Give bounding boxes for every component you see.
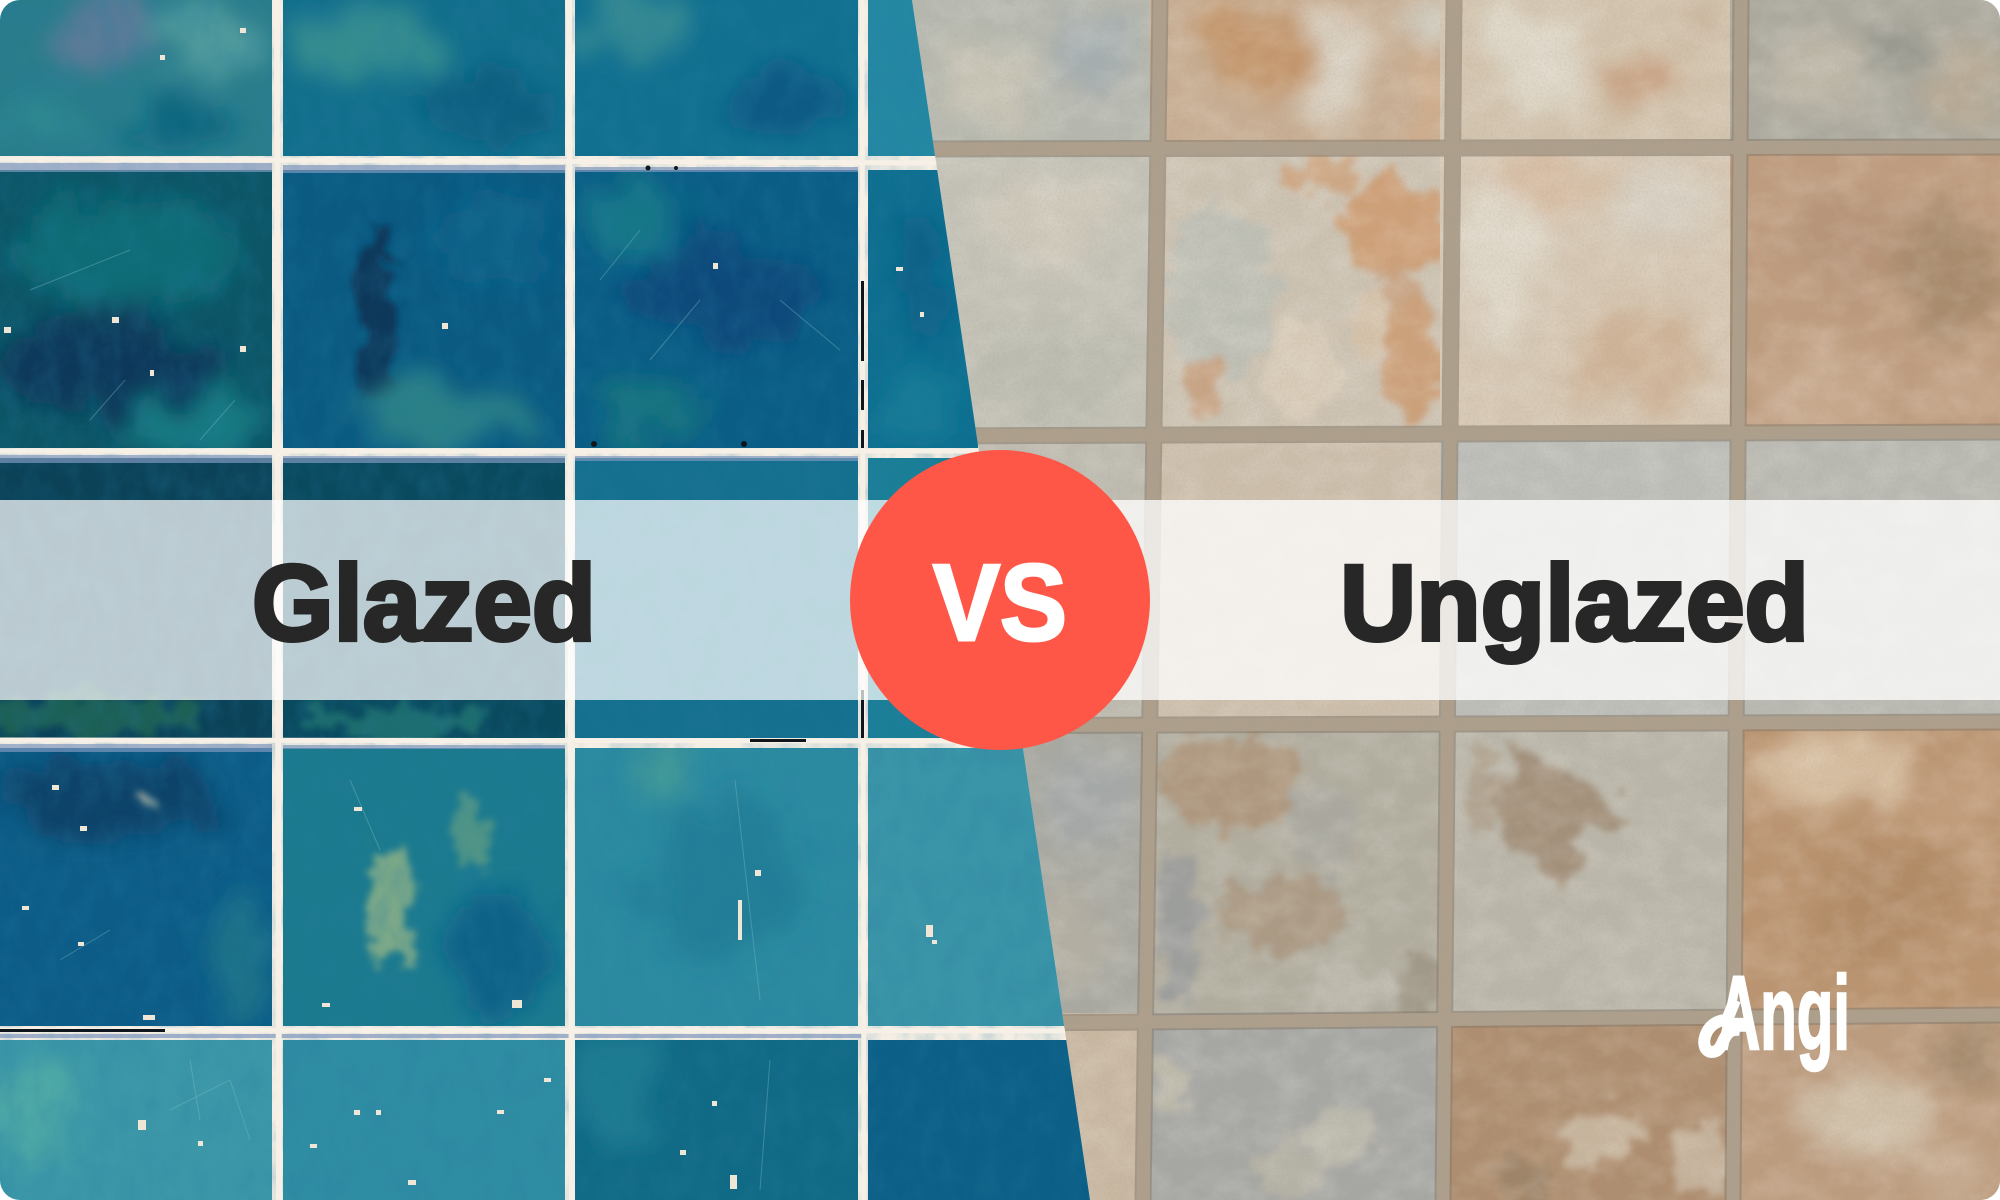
white glaze specks: [4, 28, 937, 1189]
unglazed tile row 1: [900, 0, 2000, 150]
VS badge: [850, 450, 1150, 750]
panel: glazed teal tiles: [0, 0, 1100, 1200]
heading: Unglazed: Unglazed: [1340, 542, 1809, 663]
cracks and dark gaps: [0, 166, 864, 1032]
lavender shadow under grout: [0, 163, 865, 1038]
translucent title band: [0, 500, 2000, 700]
surface scratches: [30, 230, 840, 1190]
unglazed tile row 3: [978, 438, 2000, 719]
Angi logo: [1704, 955, 1850, 1072]
large-scale stone mottling: [880, 0, 2000, 1200]
glazed tile row 4: [0, 746, 1068, 1026]
panel: unglazed stone tiles: [880, 0, 2000, 1200]
glaze streak texture: [0, 0, 1100, 1200]
VS badge: VS: [933, 542, 1067, 664]
glazed tile row 3: [0, 458, 1008, 738]
unglazed tile row 4: [1023, 728, 2000, 1013]
glazed tile row 1: [0, 0, 938, 156]
grout lines of the unglazed tiles: [900, 0, 2000, 1200]
glazed tile row 2: [0, 170, 978, 450]
glazed tile row 5: [0, 1030, 1093, 1200]
fine stone grain: [980, 0, 1896, 1118]
white grout lines of the glazed tiles: [0, 0, 1100, 1200]
Angi logo: Angi: [1717, 955, 1850, 1072]
heading: Glazed: Glazed: [252, 542, 596, 663]
unglazed tile row 5: [1062, 1013, 2000, 1200]
unglazed tile row 2: [900, 145, 2000, 440]
